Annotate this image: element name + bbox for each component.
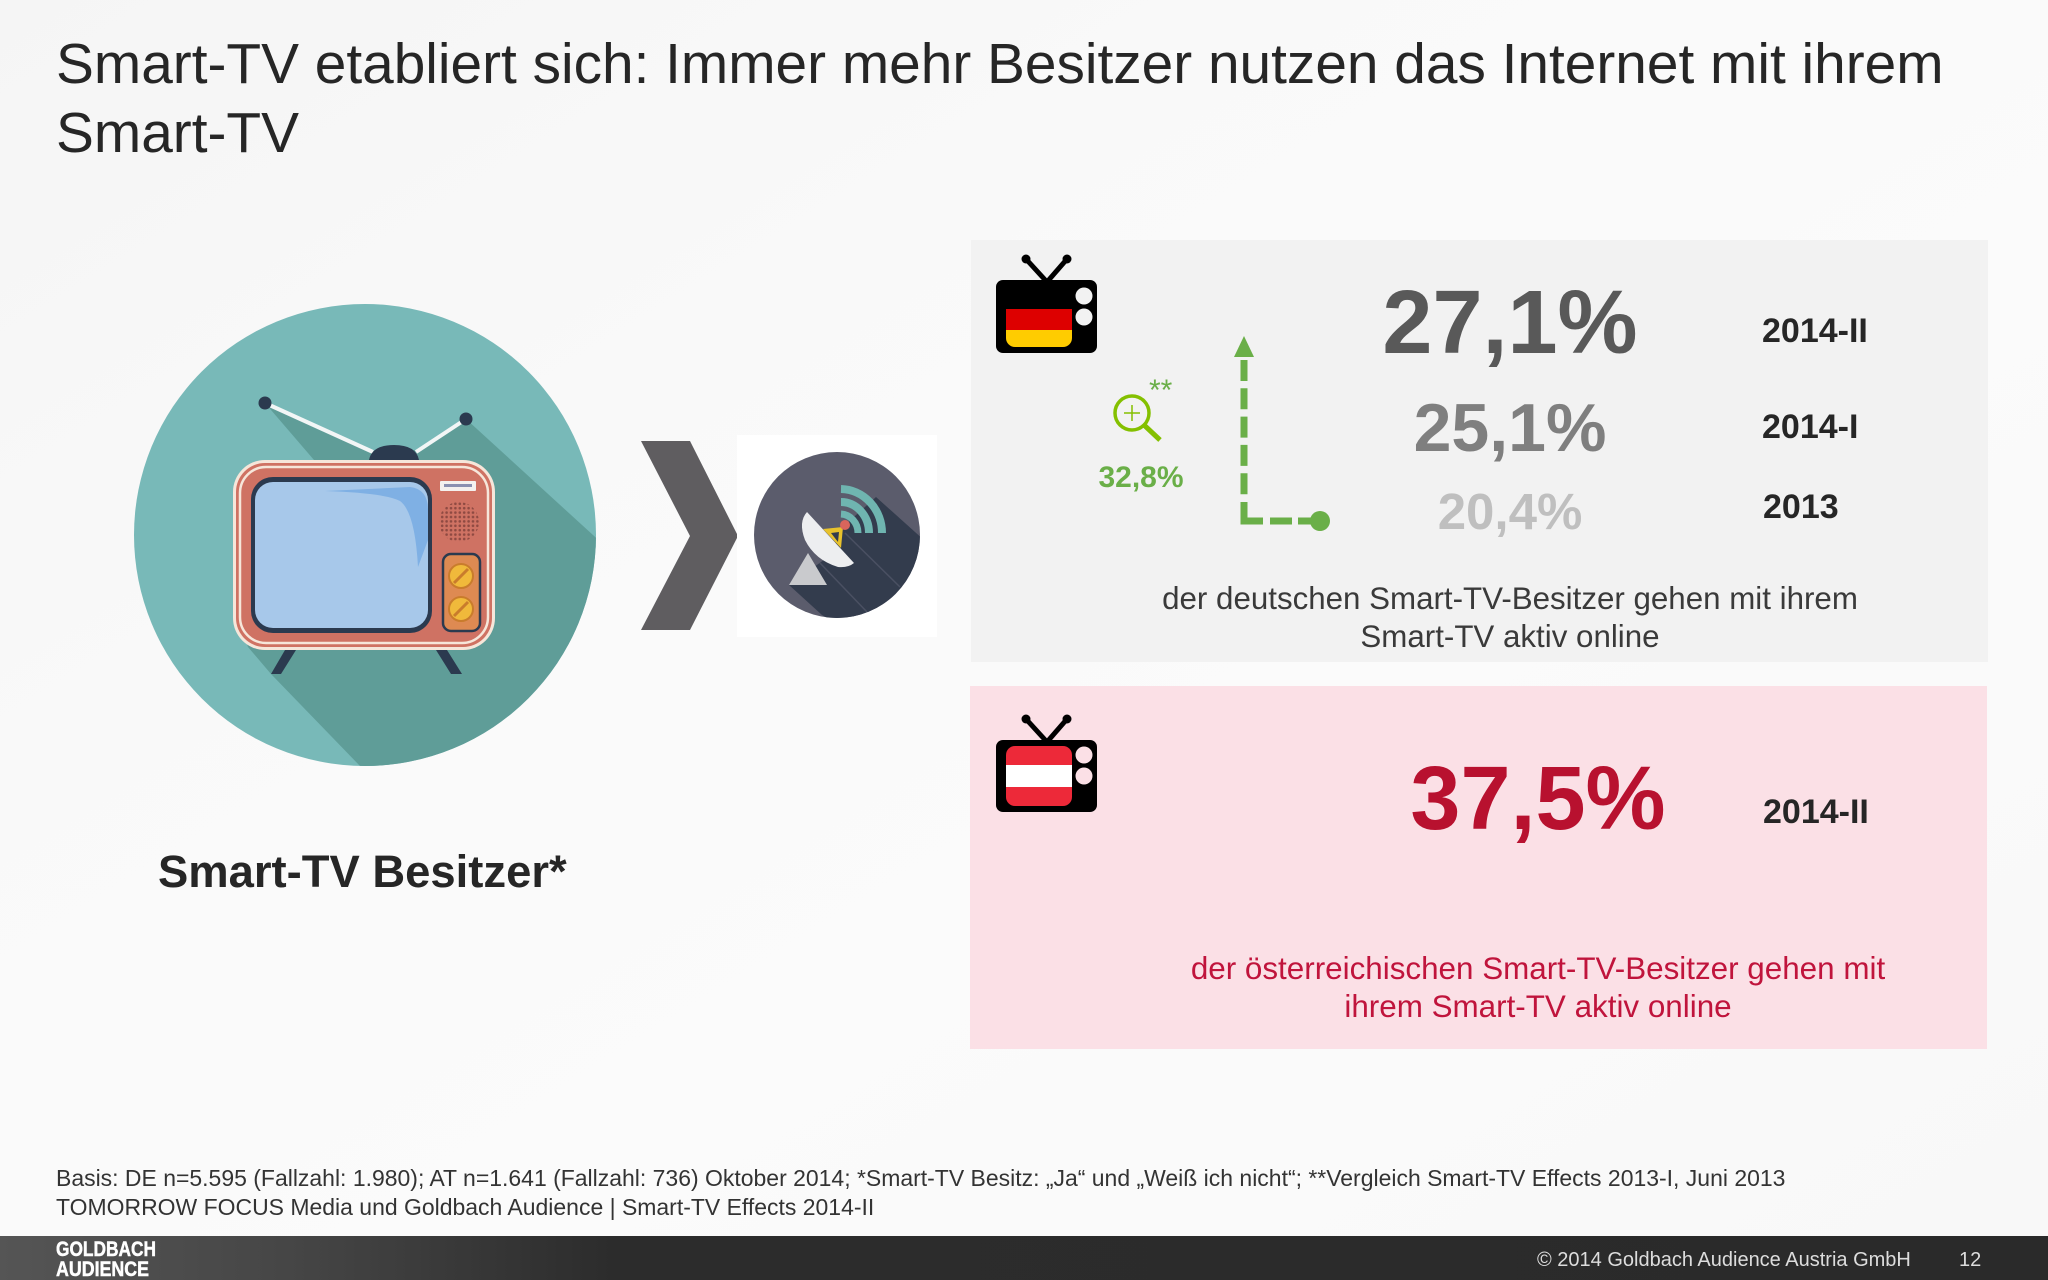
label: 2014-II: 2014-II xyxy=(1762,312,1868,350)
icon: magnifier comparison: ** xyxy=(1149,374,1173,407)
text: Austrian description: ihrem Smart-TV aktiv online xyxy=(1344,989,1732,1024)
footer bar xyxy=(0,1236,2048,1280)
label: Smart-TV Besitzer: Smart-TV Besitzer* xyxy=(158,846,567,897)
logo: Goldbach Audience xyxy=(56,1238,156,1280)
label: 2013: 2013 xyxy=(1763,488,1839,526)
footnote: TOMORROW FOCUS Media und Goldbach Audience | Smart-TV Effects 2014-II xyxy=(56,1194,874,1220)
copyright: © 2014 Goldbach Audience Austria GmbH xyxy=(1537,1249,1911,1271)
text: German description: Smart-TV aktiv online xyxy=(1360,619,1660,654)
footnote: Basis: DE n=5.595 (Fallzahl: 1.980); AT n=1.641 (Fallzahl: 736) Oktober 2014; *Smart-TV Besitz: „Ja“ und „Weiß ich nicht“; **Vergleich Smart-TV Effects 2013-I, Juni 2013 xyxy=(56,1165,1785,1191)
text: German description: der deutschen Smart-TV-Besitzer gehen mit ihrem xyxy=(1162,581,1858,616)
stat: 25,1%: 25,1% xyxy=(1414,390,1606,466)
stat: 32,8%: 32,8% xyxy=(1098,461,1184,494)
page number: 12 xyxy=(1959,1249,1981,1271)
icon: TV with German flag xyxy=(996,254,1097,353)
title: Smart-TV etabliert sich: Immer mehr Besitzer nutzen das Internet mit ihrem xyxy=(56,33,1944,96)
text: German description xyxy=(1162,581,1858,654)
text: Austrian description xyxy=(1191,951,1885,1024)
panel: Germany xyxy=(971,240,1988,662)
icon: TV with Austrian flag xyxy=(996,714,1097,812)
label: 2014-II: 2014-II xyxy=(1763,793,1869,831)
stat: 27,1%: 27,1% xyxy=(1382,273,1638,373)
icon: satellite dish xyxy=(737,452,920,618)
stat: 20,4%: 20,4% xyxy=(1438,483,1582,540)
icon: magnifier comparison xyxy=(1115,374,1173,440)
stat: 37,5%: 37,5% xyxy=(1410,749,1666,849)
icon: retro TV in teal circle xyxy=(134,304,596,766)
text: Austrian description: der österreichischen Smart-TV-Besitzer gehen mit xyxy=(1191,951,1885,986)
arrow: dashed growth line xyxy=(1234,336,1330,531)
logo: Goldbach Audience: GOLDBACH xyxy=(56,1238,156,1261)
arrow: chevron xyxy=(641,441,738,630)
label: 2014-I: 2014-I xyxy=(1762,408,1858,446)
footnote xyxy=(56,1165,1785,1220)
title xyxy=(56,33,1944,165)
title: Smart-TV xyxy=(56,102,299,165)
panel: Austria xyxy=(970,686,1987,1049)
